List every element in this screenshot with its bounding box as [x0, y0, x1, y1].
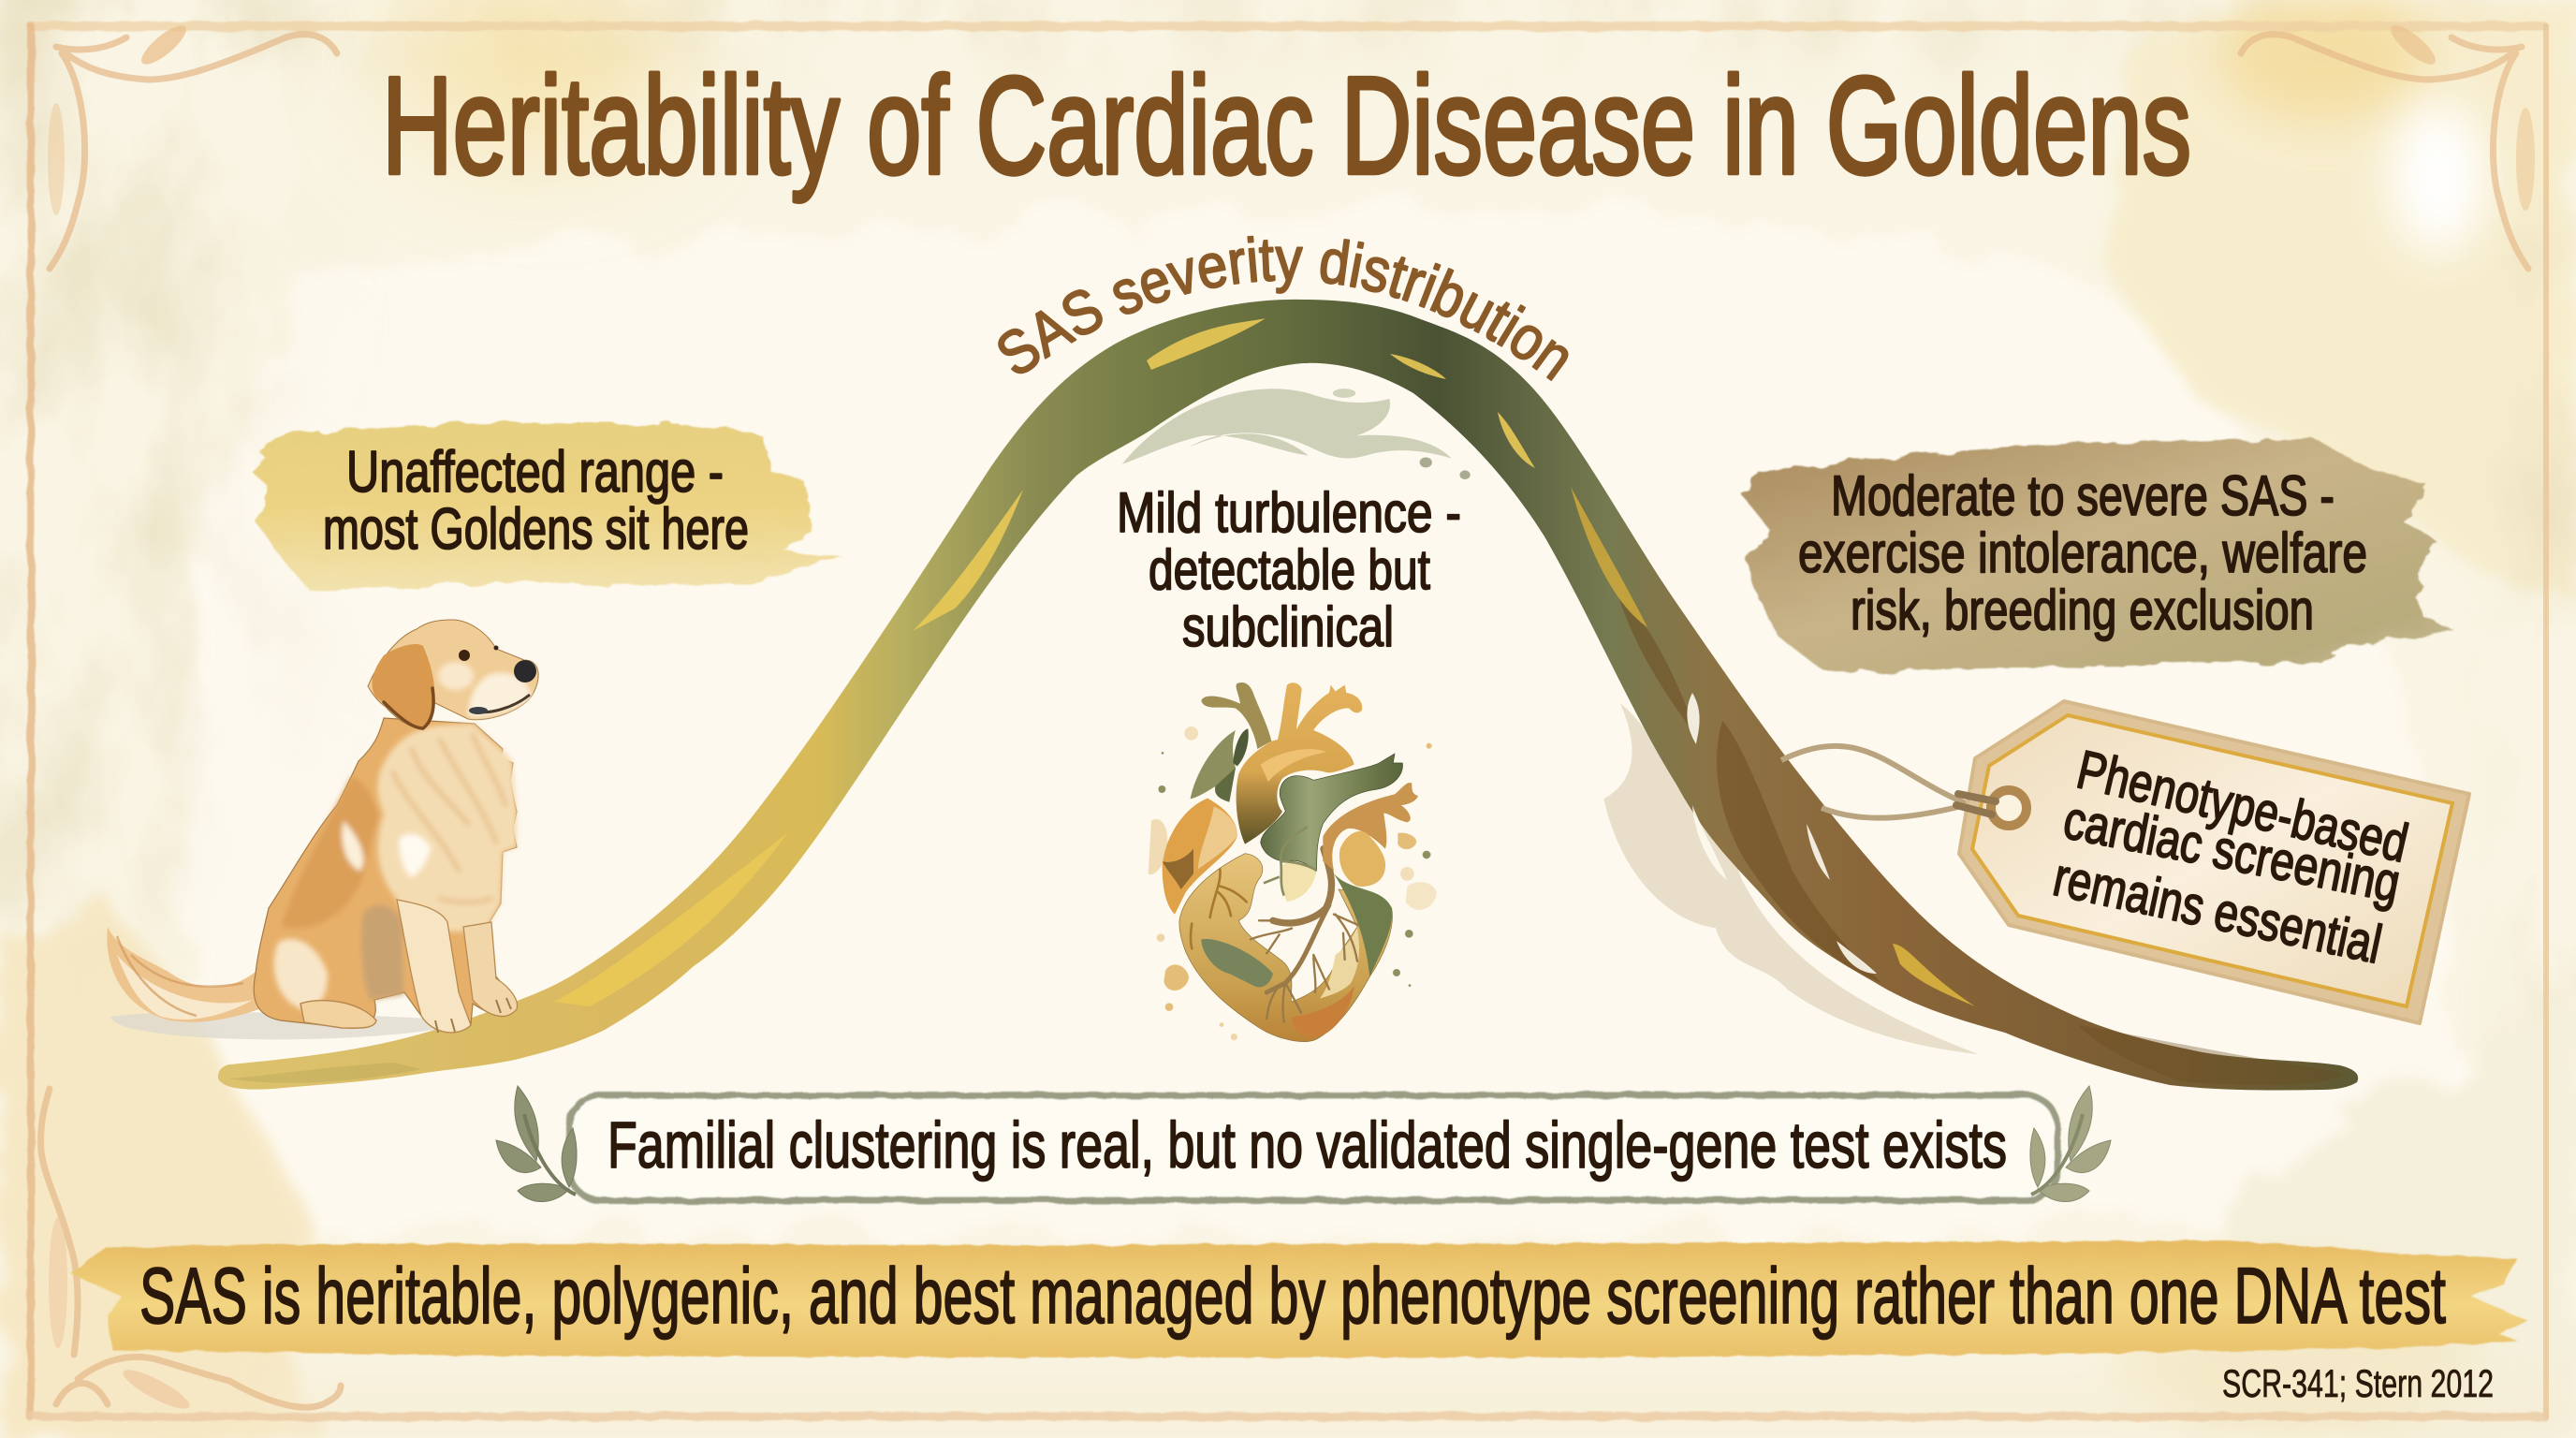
darker shoulder [281, 777, 379, 929]
left olive leaf [1191, 730, 1236, 802]
eyelet [1991, 790, 2027, 826]
left atrium [1163, 799, 1237, 915]
panel: screening tag [1781, 701, 2469, 1023]
panel: moderate to severe label: risk, breeding exclusion [1851, 579, 2314, 641]
icon: watercolor heart [1149, 682, 1437, 1042]
splash behind descending curve [1603, 703, 1979, 1054]
left laurel [496, 1086, 577, 1202]
panel: moderate to severe label: exercise intolerance, welfare [1798, 521, 2367, 584]
mouth [469, 695, 530, 714]
panel: screening tag: remains essential [2048, 846, 2387, 976]
upper body and vessels [1237, 682, 1362, 844]
chest highlight [400, 834, 431, 877]
right atrium [1339, 831, 1385, 887]
tag string [1781, 746, 1966, 818]
severity distribution curve [218, 300, 2358, 1090]
turbulence wisps above mild label [1122, 389, 1471, 479]
nose [514, 660, 536, 682]
ground shadow [110, 1012, 473, 1039]
body [254, 718, 517, 1033]
label: mild turbulence: detectable but [1149, 538, 1430, 601]
ruff fur streaks [393, 735, 505, 902]
flank highlight [343, 821, 363, 871]
paper slivers in washed-out curve [1687, 693, 1877, 974]
paint splatters [1149, 726, 1437, 1040]
brown brush stroke [1743, 438, 2452, 672]
callout: familial clustering frame: Familial clustering is real, but no validated single-gene test exists [607, 1108, 2007, 1181]
orange vessel arm [1323, 783, 1418, 871]
panel: moderate to severe label: Moderate to severe SAS - [1831, 464, 2334, 527]
gold brush stroke [253, 421, 842, 590]
tag body [1959, 701, 2469, 1023]
darker brown washes on curve [229, 599, 2341, 1085]
gold leaf streaks on curve [554, 318, 1975, 1006]
soft fur tones [274, 724, 517, 1009]
label: mild turbulence [1117, 481, 1461, 658]
ventricle [1179, 854, 1392, 1042]
eye [459, 646, 498, 661]
tag text: Phenotype-based [2071, 739, 2413, 874]
pale inner [1281, 862, 1317, 902]
panel: unaffected range label [253, 421, 842, 590]
green pulmonary piece [1261, 754, 1402, 871]
front legs [397, 900, 471, 1033]
haunch highlight [274, 939, 328, 1009]
callout: familial clustering frame [496, 1086, 2111, 1202]
head [368, 620, 538, 728]
panel: screening tag: cardiac screening [2059, 789, 2405, 914]
chest ruff [377, 724, 517, 936]
underbelly [361, 904, 404, 1000]
face highlights [438, 662, 532, 717]
label: mild turbulence: subclinical [1182, 595, 1394, 658]
coronary vessels [1191, 849, 1359, 1022]
gold banner wash [70, 1240, 2527, 1357]
panel: unaffected range label: Unaffected range - [346, 440, 724, 505]
panel: unaffected range label: most Goldens sit here [323, 497, 749, 562]
ear [372, 644, 434, 727]
tail [107, 927, 267, 1022]
panel: moderate to severe label [1743, 438, 2452, 672]
curve label: SAS severity distribution: SAS severity distribution [998, 236, 1569, 381]
illustration: golden retriever [107, 620, 538, 1039]
right laurel [2030, 1086, 2111, 1202]
hind foot [300, 1001, 376, 1028]
label: mild turbulence: Mild turbulence - [1117, 481, 1461, 544]
string knot [1956, 794, 1996, 814]
